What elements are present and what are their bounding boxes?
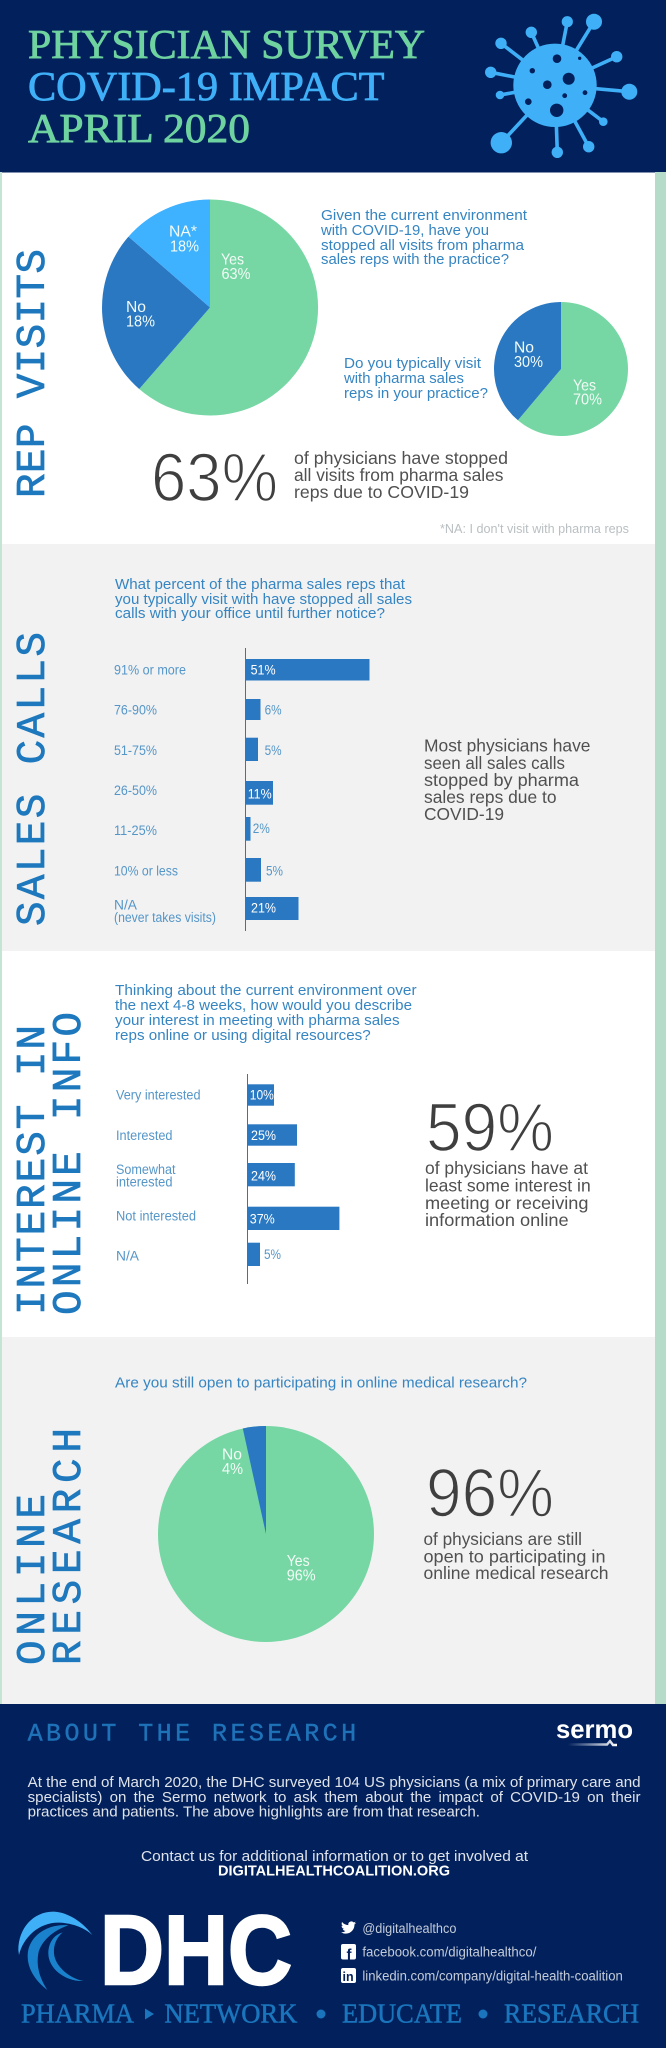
bar chart: online interest: 37% (250, 1212, 275, 1226)
bar chart: sales calls: 6% (265, 702, 282, 718)
social links: @digitalhealthco (362, 1921, 456, 1936)
contact: Contact us for additional information or to get involved at (141, 1848, 529, 1865)
stat caption: 96%: of physicians are still (424, 1529, 582, 1549)
stat: 63%: 63% (151, 439, 278, 516)
icon: facebook (341, 1944, 356, 1964)
bar chart: sales calls: 51% (251, 662, 276, 678)
stat caption: 63%: of physicians have stopped (294, 448, 508, 468)
panel: sales calls (2, 544, 655, 951)
question: online interest (115, 982, 417, 1044)
bar chart: online interest: Interested (116, 1128, 172, 1143)
question: sales calls: you typically visit with have stopped all sales (115, 591, 412, 608)
heading: online research: ONLINE (11, 1494, 57, 1665)
contact (141, 1848, 529, 1880)
bar chart: online interest: 5% (264, 1247, 281, 1262)
bar chart: sales calls: 2% (253, 821, 270, 836)
pie chart: typically visit: 70% (573, 392, 602, 408)
logo: sermo: sermo (556, 1714, 633, 1744)
stat: 59%: 59% (426, 1089, 554, 1166)
bar chart: online interest: Somewhat (116, 1162, 176, 1177)
social links: facebook.com/digitalhealthco/ (362, 1945, 537, 1960)
panel: interest in online info (2, 951, 655, 1337)
question: typically visit: with pharma sales (343, 370, 464, 387)
pie chart: online research: No (222, 1446, 242, 1464)
contact: DIGITALHEALTHCOALITION.ORG (218, 1862, 450, 1880)
bar chart: sales calls: N/A (114, 898, 137, 912)
question: typically visit: reps in your practice? (344, 385, 488, 402)
tagline: NETWORK (164, 1999, 298, 2029)
heading: online research (11, 1428, 93, 1665)
icon: linkedin (341, 1968, 356, 1984)
callout: most physicians (424, 736, 590, 824)
header band (0, 0, 666, 172)
bar chart: online interest: 10% (250, 1088, 274, 1102)
stat caption: 59%: meeting or receiving (425, 1193, 588, 1213)
stat caption: 59%: information online (425, 1210, 569, 1230)
title: PHYSICIAN SURVEY (28, 21, 425, 67)
bar chart: sales calls: 91% or more (114, 662, 186, 678)
title (28, 21, 425, 151)
stat caption: 63%: all visits from pharma sales (294, 465, 504, 485)
about paragraph (28, 1774, 641, 1820)
bar chart: online interest: interested (116, 1174, 172, 1189)
bar chart: sales calls: 5% (266, 864, 283, 878)
question: sales calls: What percent of the pharma sales reps that (115, 576, 406, 593)
stat caption: 63% (294, 448, 508, 502)
bar chart: online interest: Very interested (116, 1088, 200, 1102)
question: online interest: your interest in meeting with pharma sales (115, 1012, 400, 1029)
icon: linkedin: in (342, 1970, 354, 1984)
pie chart: stopped visits: NA* (169, 224, 197, 240)
question: stopped visits: with COVID-19, have you (320, 222, 489, 239)
stat caption: 63%: reps due to COVID-19 (294, 482, 469, 502)
bar chart: sales calls: (never takes visits) (114, 910, 216, 925)
about paragraph: At the end of March 2020, the DHC surveyed 104 US physicians (a mix of primary care and (28, 1774, 641, 1791)
panel: footer (0, 1704, 666, 2048)
pie chart: stopped visits: 18% (126, 314, 155, 330)
bar chart: sales calls: 21% (251, 900, 276, 916)
question: sales calls (115, 576, 412, 622)
icon: twitter (341, 1921, 356, 1934)
pie chart: online research: Yes (287, 1553, 310, 1570)
bar chart: online interest: Not interested (116, 1209, 196, 1224)
title: APRIL 2020 (28, 105, 250, 151)
footnote: *NA: I don't visit with pharma reps (440, 521, 629, 536)
bar chart: sales calls: 26-50% (114, 783, 157, 798)
pie chart: stopped visits: 18% (170, 238, 199, 256)
pie chart: typically visit: Yes (573, 378, 596, 394)
panel: rep visits (2, 172, 655, 544)
question: stopped visits: Given the current environment (321, 207, 528, 224)
callout: most physicians: sales reps due to (424, 787, 556, 807)
question: stopped visits: sales reps with the practice? (321, 251, 509, 268)
callout: most physicians: seen all sales calls (424, 753, 565, 773)
question: online interest: the next 4-8 weeks, how would you describe (115, 997, 412, 1014)
bar chart: online interest: 25% (251, 1128, 276, 1143)
stat caption: 96%: open to participating in (424, 1546, 606, 1566)
heading: interest in online info: INTEREST IN (11, 1025, 57, 1315)
question: sales calls: calls with your office until further notice? (115, 605, 385, 622)
heading: interest in online info (11, 1012, 93, 1315)
heading: online research: RESEARCH (47, 1428, 93, 1665)
bar chart: online interest: N/A (116, 1249, 139, 1264)
stat caption: 96% (424, 1529, 608, 1583)
heading: about the research: ABOUT THE RESEARCH (28, 1720, 356, 1749)
side strips (0, 172, 666, 1704)
pie chart: stopped visits: Yes (221, 252, 244, 268)
bar chart: sales calls: 10% or less (114, 864, 178, 878)
pie chart: online research (158, 1426, 374, 1642)
callout: most physicians: stopped by pharma (424, 770, 579, 790)
social links: linkedin.com/company/digital-health-coalition (362, 1968, 623, 1983)
bar chart: online interest (116, 1074, 339, 1284)
question: typically visit (343, 355, 488, 402)
bar chart: sales calls: 5% (265, 743, 282, 758)
title: COVID-19 IMPACT (28, 63, 384, 109)
tagline: EDUCATE (342, 1999, 462, 2029)
question: online interest: reps online or using digital resources? (115, 1027, 371, 1044)
pie chart: typically visit: 30% (514, 354, 543, 371)
heading: sales calls: SALES CALLS (11, 632, 57, 926)
stat: 96%: 96% (426, 1454, 554, 1532)
question: stopped visits: stopped all visits from pharma (321, 237, 525, 254)
icon: facebook: f (346, 1946, 352, 1964)
heading: interest in online info: ONLINE INFO (47, 1012, 93, 1315)
stat caption: 59% (425, 1158, 591, 1230)
question: online interest: Thinking about the current environment over (115, 982, 417, 999)
bar chart: sales calls: 76-90% (114, 702, 157, 718)
question: stopped visits (320, 207, 528, 268)
tagline: RESEARCH (504, 1999, 639, 2029)
stat caption: 96%: online medical research (424, 1563, 608, 1583)
bar chart: sales calls: 11-25% (114, 823, 157, 838)
tagline: PHARMA (21, 1999, 134, 2029)
callout: most physicians: Most physicians have (424, 736, 590, 756)
icon: virus (485, 14, 637, 158)
stat caption: 59%: of physicians have at (425, 1158, 588, 1178)
tagline (21, 1999, 639, 2029)
callout: most physicians: COVID-19 (424, 804, 504, 824)
pie chart: stopped visits: No (126, 299, 146, 316)
pie chart: online research: 4% (222, 1461, 243, 1478)
pie chart: stopped visits: 63% (222, 266, 250, 283)
heading: rep visits: REP VISITS (11, 249, 57, 498)
pie chart: stopped visits (102, 199, 318, 416)
pie chart: online research: 96% (287, 1568, 316, 1584)
bar chart: sales calls: 51-75% (114, 743, 157, 758)
question: typically visit: Do you typically visit (344, 355, 482, 372)
about paragraph: practices and patients. The above highlights are from that research. (28, 1804, 480, 1820)
social links (341, 1921, 623, 1984)
logo: DHC: DHC (100, 1895, 292, 2005)
panel: online research (2, 1337, 655, 1704)
bar chart: sales calls: 11% (248, 786, 272, 802)
logo: DHC (18, 1895, 292, 2005)
about paragraph: specialists) on the Sermo network to ask them about the impact of COVID-19 on their (28, 1789, 641, 1806)
question: online research: Are you still open to participating in online medical research? (115, 1374, 527, 1391)
bar chart: online interest: 24% (251, 1168, 276, 1184)
bar chart: sales calls (114, 648, 370, 931)
pie chart: typically visit (494, 302, 628, 436)
stat caption: 59%: least some interest in (425, 1176, 591, 1196)
pie chart: typically visit: No (514, 340, 534, 356)
